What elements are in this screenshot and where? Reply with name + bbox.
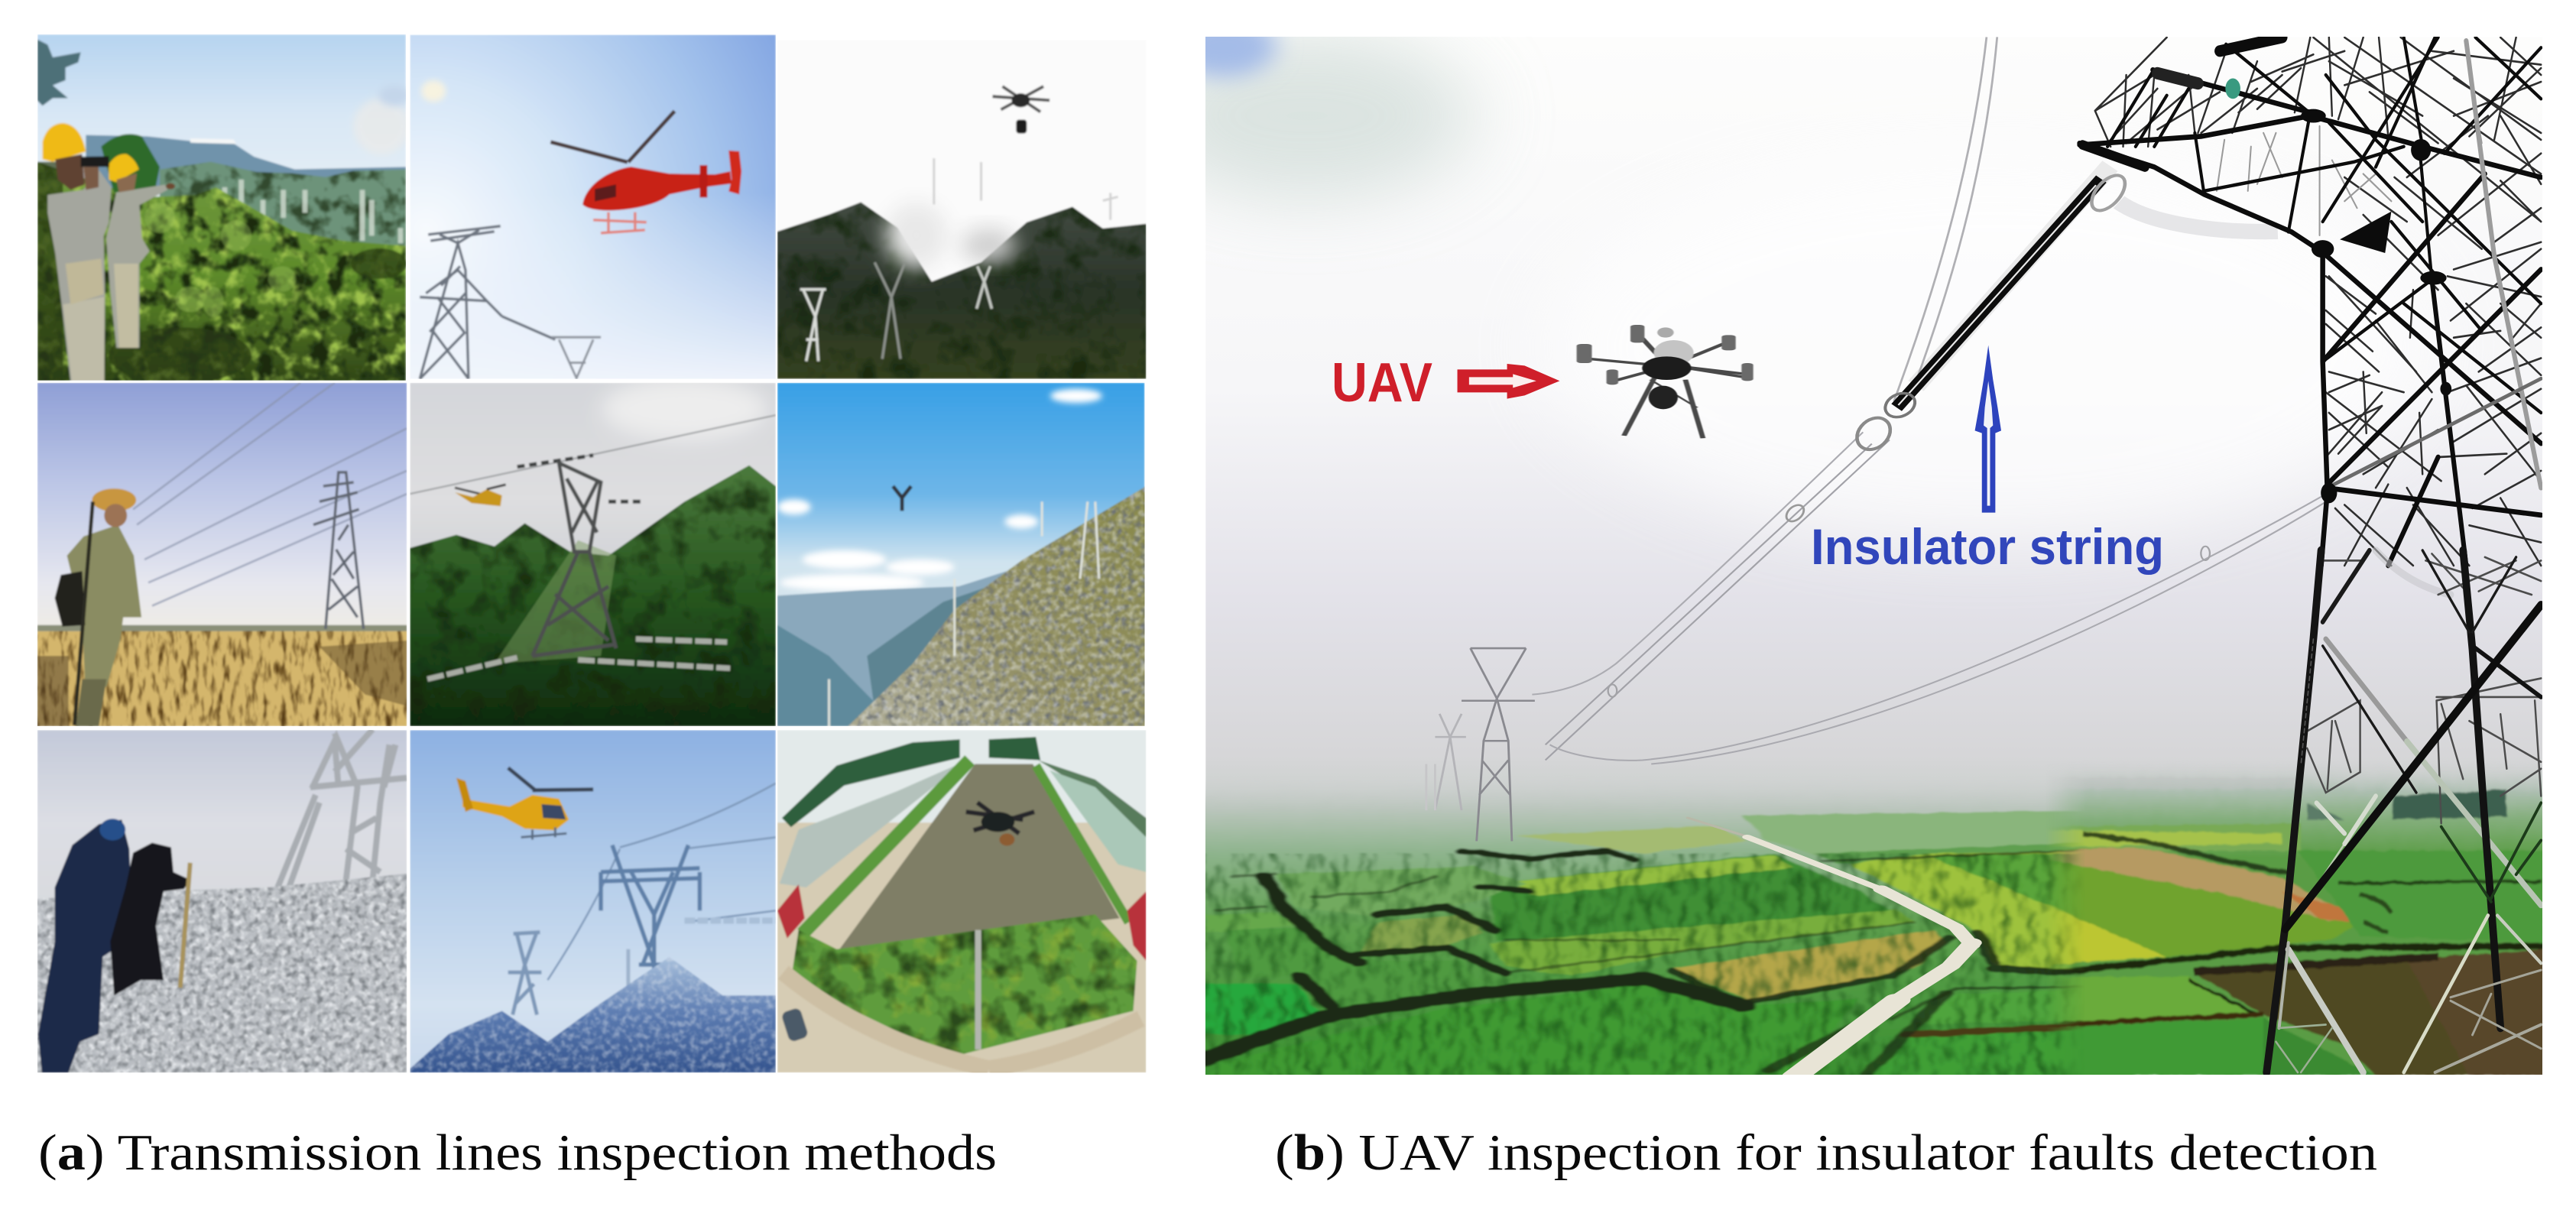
icon: lattice tower xyxy=(532,463,616,656)
teal insulator cap xyxy=(2225,78,2240,99)
icon: transmission tower large xyxy=(601,845,699,972)
photo: drone above a blue valley and hillside xyxy=(777,383,1146,726)
caption b: (b) UAV inspection for insulator faults detection xyxy=(1275,1124,2377,1181)
photo: red helicopter over a tower xyxy=(410,34,776,379)
label: UAV: UAV xyxy=(1332,352,1432,414)
icon: yellow helicopter xyxy=(456,768,593,839)
icon: distant transmission towers xyxy=(1426,648,1535,841)
photo: yellow helicopter over frosted towers xyxy=(410,730,776,1072)
icon: black insulator string xyxy=(1850,170,2132,455)
photo: workers climbing a frozen slope xyxy=(37,729,407,1072)
icon: small drone xyxy=(893,486,911,511)
icon: lattice tower xyxy=(420,226,601,379)
label: Insulator string: Insulator string xyxy=(1811,518,2164,575)
icon: transmission tower small xyxy=(508,933,541,1015)
photo: green farmland left of the road xyxy=(1189,777,2133,1085)
arrow: red pointing to drone xyxy=(1458,364,1559,399)
icon: inspector with straw hat xyxy=(55,488,141,726)
photo: drone above misty mountains xyxy=(777,84,1147,379)
photo: farmland right of the road xyxy=(2046,762,2544,1075)
icon: UAV hexacopter xyxy=(1577,325,1754,438)
photo: distant conductors xyxy=(1532,37,2326,764)
photo: sky background xyxy=(1140,15,2542,1074)
big lattice tower upper section xyxy=(2079,37,2541,566)
icon: white farm road xyxy=(1688,818,1972,1076)
caption a: (a) Transmission lines inspection methods xyxy=(38,1124,997,1181)
photo: inspector in a wheat field xyxy=(37,383,407,726)
icon: iced lattice tower xyxy=(277,729,407,887)
icon: hexacopter drone xyxy=(992,86,1050,134)
photo: helicopter and tower in green mountains xyxy=(410,378,776,726)
icon: lattice tower xyxy=(313,472,364,629)
panel b: UAV inspection photograph xyxy=(1140,15,2544,1085)
photo: fisheye view of drone over paddy field xyxy=(777,730,1146,1072)
panel a: grid of nine inspection photos xyxy=(37,34,1146,1072)
photo: workers with binoculars on hillside xyxy=(37,34,410,384)
big lattice tower lower section xyxy=(2266,550,2541,1072)
icon: two climbing workers xyxy=(38,819,190,1072)
icon: small yellow helicopter xyxy=(455,485,506,506)
icon: red helicopter xyxy=(550,111,741,233)
arrow: blue pointing to insulator string xyxy=(1975,345,2001,513)
icon: large drone xyxy=(966,803,1034,846)
